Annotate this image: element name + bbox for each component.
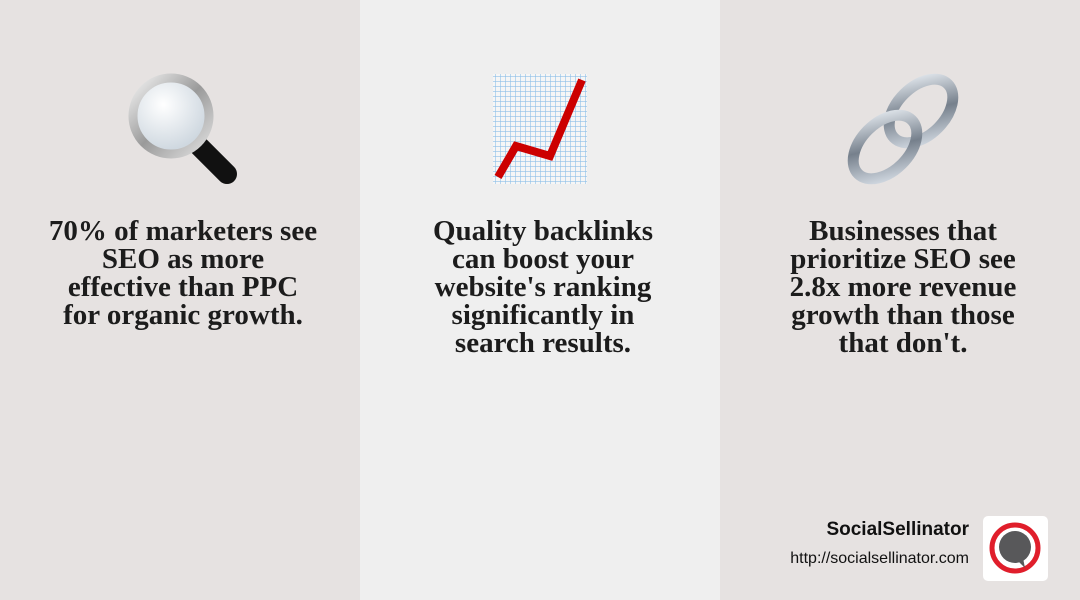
text: left stat: SEO as more xyxy=(102,243,264,275)
brand text: SocialSellinator xyxy=(826,519,969,540)
text: right stat: that don't. xyxy=(839,327,967,359)
text: left stat: effective than PPC xyxy=(68,271,298,303)
text: right stat: 2.8x more revenue xyxy=(790,271,1016,303)
icon: magnifier xyxy=(128,74,237,184)
brand text: http://socialsellinator.com xyxy=(790,550,969,567)
text: middle stat: search results. xyxy=(455,327,631,359)
text: middle stat: website's ranking xyxy=(435,271,651,303)
text: middle stat: Quality backlinks xyxy=(433,215,653,247)
logo xyxy=(983,516,1048,581)
text: right stat xyxy=(790,215,1016,359)
text: left stat: 70% of marketers see xyxy=(49,215,317,247)
panel: right xyxy=(720,0,1080,600)
text: right stat: prioritize SEO see xyxy=(790,243,1016,275)
text: left stat: for organic growth. xyxy=(63,299,303,331)
icon: chain xyxy=(848,74,958,184)
text: left stat xyxy=(49,215,317,331)
text: middle stat: significantly in xyxy=(452,299,634,331)
icon: chart xyxy=(493,74,587,184)
text: middle stat xyxy=(433,215,653,359)
brand text xyxy=(790,519,969,567)
panel: left xyxy=(0,0,360,600)
text: right stat: growth than those xyxy=(791,299,1015,331)
text: right stat: Businesses that xyxy=(809,215,997,247)
panel: middle xyxy=(360,0,720,600)
text: middle stat: can boost your xyxy=(452,243,634,275)
